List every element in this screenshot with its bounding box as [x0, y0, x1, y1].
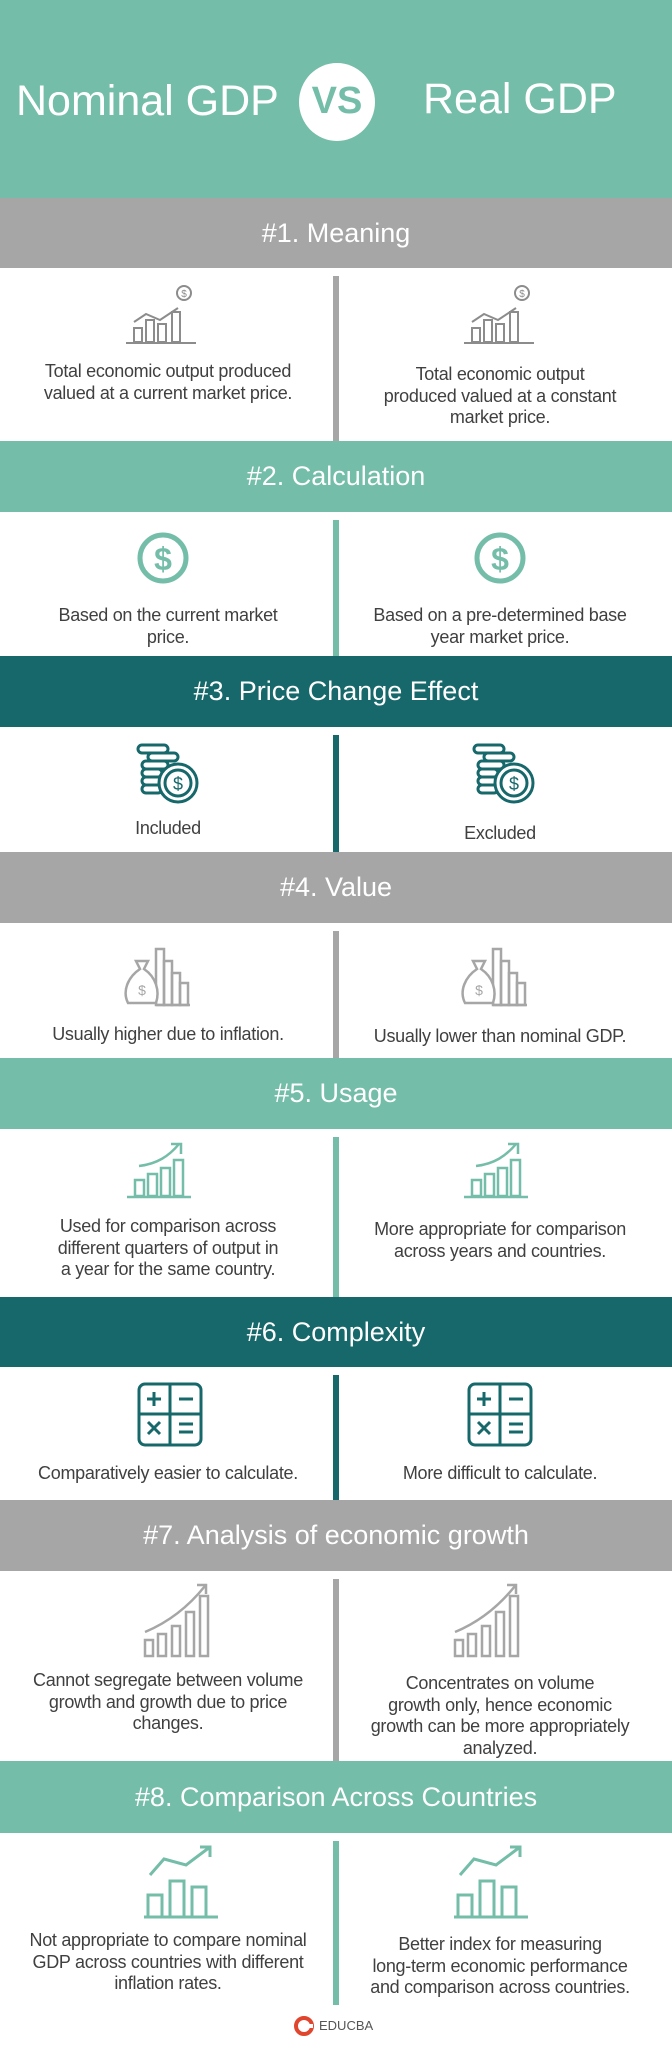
- text left: different quarters of output in: [58, 1238, 278, 1258]
- text left: [44, 361, 292, 403]
- vs badge: [299, 63, 375, 141]
- vs badge: VS: [312, 80, 362, 122]
- text left: [30, 1930, 306, 1993]
- bar 2: [0, 441, 672, 512]
- icon: dollar circle left: [138, 532, 188, 584]
- bar 5: [0, 1058, 672, 1129]
- text right: Based on a pre-determined base: [373, 605, 627, 625]
- icon: coins left: $: [173, 774, 183, 794]
- section 1 content: [44, 276, 616, 441]
- icon: dollar circle left: $: [154, 541, 172, 577]
- bar 8: [0, 1761, 672, 1833]
- icon: calculator left: [138, 1382, 202, 1446]
- text right: [373, 605, 627, 647]
- bar 6: #6. Complexity: [247, 1316, 425, 1346]
- text left: inflation rates.: [114, 1973, 222, 1993]
- bar 3: [0, 656, 672, 727]
- section 5 content: [58, 1137, 626, 1297]
- icon: chart dollar right: $: [519, 289, 525, 300]
- bar 4: [0, 852, 672, 923]
- section 7 content: [33, 1579, 630, 1761]
- icon: money bag left: $: [138, 982, 146, 998]
- bar 5: #5. Usage: [274, 1078, 398, 1108]
- text right: Total economic output: [416, 364, 584, 384]
- icon: zigzag chart right: [454, 1846, 528, 1918]
- text right: [384, 364, 616, 427]
- icon: money bag left: [124, 948, 190, 1006]
- bar 1: #1. Meaning: [262, 218, 410, 248]
- text right: market price.: [450, 407, 550, 427]
- icon: growth bars right: [464, 1142, 528, 1198]
- text right: More appropriate for comparison: [374, 1219, 626, 1239]
- bar 3: #3. Price Change Effect: [194, 676, 478, 706]
- icon: chart dollar right: [464, 285, 534, 344]
- text left: Cannot segregate between volume: [33, 1670, 303, 1690]
- icon: coins left: [136, 744, 198, 804]
- text left: [33, 1670, 303, 1733]
- text right: growth can be more appropriately: [371, 1716, 629, 1736]
- icon: educba: [294, 2016, 314, 2036]
- icon: chart dollar left: $: [181, 289, 187, 300]
- section 2 content: [58, 520, 627, 656]
- section 4 content: [52, 931, 626, 1058]
- text right: Usually lower than nominal GDP.: [374, 1026, 626, 1046]
- icon: zigzag chart left: [144, 1846, 218, 1918]
- bar 7: #7. Analysis of economic growth: [143, 1520, 529, 1550]
- text left: changes.: [133, 1713, 203, 1733]
- text right: [370, 1934, 630, 1997]
- text left: GDP across countries with different: [33, 1952, 303, 1972]
- text right: produced valued at a constant: [384, 386, 616, 406]
- section 6 content: [38, 1375, 597, 1500]
- bar 8: #8. Comparison Across Countries: [135, 1782, 537, 1812]
- section 3 content: [135, 735, 536, 852]
- text left: growth and growth due to price: [49, 1692, 287, 1712]
- text left: [58, 605, 278, 647]
- footer logo: EDUCBA: [319, 2018, 373, 2033]
- text left: Comparatively easier to calculate.: [38, 1463, 298, 1483]
- text right: and comparison across countries.: [370, 1977, 630, 1997]
- icon: rising bars left: [144, 1584, 210, 1658]
- text right: long-term economic performance: [372, 1956, 628, 1976]
- text left: price.: [147, 626, 189, 646]
- bar 2: #2. Calculation: [247, 461, 425, 491]
- text right: Better index for measuring: [398, 1934, 602, 1954]
- text right: analyzed.: [463, 1738, 537, 1758]
- icon: growth bars left: [127, 1142, 191, 1198]
- text right: year market price.: [431, 626, 569, 646]
- text left: [58, 1216, 278, 1279]
- icon: coins right: $: [509, 774, 519, 794]
- footer logo: [294, 2016, 374, 2036]
- header: [0, 0, 672, 198]
- icon: money bag right: [461, 948, 527, 1006]
- icon: calculator right: [468, 1382, 532, 1446]
- text right: [374, 1219, 626, 1261]
- icon: coins right: [472, 744, 534, 804]
- text right: across years and countries.: [394, 1240, 606, 1260]
- text left: Total economic output produced: [45, 361, 291, 381]
- text right: [371, 1673, 630, 1758]
- text right: Concentrates on volume: [406, 1673, 594, 1693]
- text right: growth only, hence economic: [388, 1694, 612, 1714]
- bar 1: [0, 198, 672, 268]
- text left: Not appropriate to compare nominal: [30, 1930, 306, 1950]
- text left: Usually higher due to inflation.: [52, 1024, 284, 1044]
- text right: Excluded: [464, 823, 536, 843]
- section 8 content: [30, 1841, 630, 2005]
- text left: Used for comparison across: [60, 1216, 276, 1236]
- title left: Nominal GDP: [16, 77, 279, 125]
- text left: Included: [135, 818, 201, 838]
- bar 4: #4. Value: [280, 872, 392, 902]
- icon: money bag right: $: [475, 982, 483, 998]
- text left: a year for the same country.: [61, 1259, 275, 1279]
- text right: More difficult to calculate.: [403, 1463, 597, 1483]
- bar 7: [0, 1500, 672, 1571]
- icon: dollar circle right: $: [491, 541, 509, 577]
- text left: valued at a current market price.: [44, 382, 292, 402]
- title right: Real GDP: [423, 75, 617, 123]
- icon: dollar circle right: [474, 532, 526, 584]
- text left: Based on the current market: [58, 605, 278, 625]
- icon: rising bars right: [454, 1584, 520, 1658]
- icon: chart dollar left: [126, 285, 196, 344]
- bar 6: [0, 1297, 672, 1367]
